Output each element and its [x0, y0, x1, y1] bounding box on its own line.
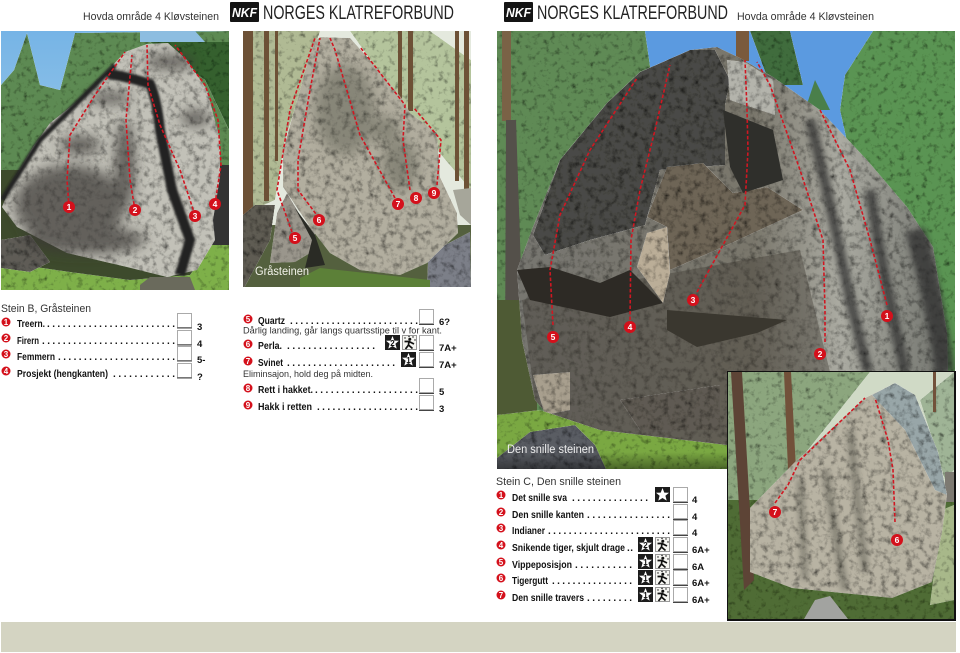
route 4: .. [627, 543, 633, 554]
route 4: Prosjekt (hengkanten) [17, 369, 108, 380]
badge 4 [209, 198, 221, 210]
route 5: 1 [643, 558, 648, 567]
badge 2 [129, 204, 141, 216]
header left: area title: Hovda område 4 Kløvsteinen [83, 11, 219, 23]
tree trunks [243, 31, 469, 231]
route 7: 6A+ [692, 595, 710, 606]
roof overhang shadows [647, 163, 803, 270]
header right: area title: Hovda område 4 Kløvsteinen [737, 11, 874, 23]
badge 5 [547, 331, 559, 343]
route 3: 4 [692, 528, 698, 539]
route 4: 4 [499, 541, 504, 550]
route 4: 6A+ [692, 545, 710, 556]
route 3: 3 [4, 350, 9, 359]
logo right: NKF [506, 5, 532, 20]
badge 3: 3 [691, 295, 696, 305]
badge 7: 7 [396, 199, 401, 209]
route 8: Rett i hakket. [258, 385, 313, 396]
badge 1 [881, 310, 893, 322]
route 2: .......................... [42, 336, 175, 347]
route 5: 6A [692, 562, 704, 573]
route 6: ................. [287, 341, 375, 352]
route 1: Treern. [17, 319, 45, 330]
route 2 [496, 504, 698, 523]
route 9: 3 [439, 404, 444, 415]
route 3: 3 [499, 524, 504, 533]
route 3: Indianer [512, 526, 545, 537]
route 1: 1 [4, 318, 9, 327]
photo: Gråsteinen with routes 5-9 [243, 31, 471, 290]
routes [550, 60, 887, 342]
badge 9 [428, 187, 440, 199]
boulder [2, 43, 220, 277]
route 9: 9 [246, 401, 251, 410]
badge 1 [63, 201, 75, 213]
route 1: ......................... [47, 319, 175, 330]
badge 3 [189, 210, 201, 222]
route 5 note: Dårlig landing, går langs quartsstipe til v for kant. [243, 326, 442, 336]
route 6: 6A+ [692, 578, 710, 589]
badge 1: 1 [67, 202, 72, 212]
route 1: 1 [499, 491, 504, 500]
foreground rock [497, 425, 606, 469]
route 7: 1 [406, 356, 411, 365]
route 7 note: Eliminsajon, hold deg på midten. [243, 369, 373, 380]
badge 3: 3 [193, 211, 198, 221]
route 8: 5 [439, 387, 445, 398]
badge 6: 6 [317, 215, 322, 225]
route 5: 5 [499, 558, 504, 567]
badge 3 [687, 294, 699, 306]
route 4: 4 [4, 367, 9, 376]
badge 4: 4 [213, 199, 218, 209]
grass [1, 240, 229, 290]
heading: Stein C, Den snille steinen [496, 476, 621, 488]
route 7: 7 [499, 591, 504, 600]
route 6: 1 [643, 574, 648, 583]
route 2: ................ [587, 510, 670, 521]
route 5: 6? [439, 317, 450, 328]
badge 2 [814, 348, 826, 360]
rock bottom right [427, 232, 471, 287]
route 9: Hakk i retten [258, 402, 312, 413]
route 2: Firern [17, 336, 39, 347]
route 4: ? [197, 372, 203, 383]
route 4: Snikende tiger, skjult drage [512, 543, 625, 554]
badge 6 [313, 214, 325, 226]
boulder [283, 37, 458, 275]
route 6: Perla. [258, 341, 282, 352]
route 9 [244, 396, 444, 415]
footer band [1, 622, 956, 652]
organisation name left: NORGES KLATREFORBUND [263, 3, 454, 24]
routes [67, 45, 221, 215]
route 5: Vippeposisjon [512, 560, 572, 571]
logo left: NKF [232, 5, 258, 20]
route 1 [496, 487, 698, 506]
route 1: Det snille sva [512, 493, 567, 504]
route 6 [496, 570, 710, 589]
route 4 [2, 364, 203, 383]
light rim near top [727, 60, 775, 115]
heading: Stein B, Gråsteinen [1, 303, 91, 315]
route 8: .................... [315, 385, 418, 396]
trunks [731, 372, 754, 590]
route 3: ....................... [58, 352, 175, 363]
route 6: 7A+ [439, 343, 457, 354]
badge 7 [392, 198, 404, 210]
routes [277, 38, 441, 232]
badge 7 [769, 506, 781, 518]
route 1: 3 [197, 322, 202, 333]
badge 8: 8 [414, 193, 419, 203]
route 7: 7 [246, 357, 251, 366]
route 2: Den snille kanten [512, 510, 584, 521]
photo: boulder B left face with routes 1-4 [1, 31, 229, 290]
badge 1: 1 [885, 311, 890, 321]
route 7: Den snille travers [512, 593, 584, 604]
badge 6: 6 [895, 535, 900, 545]
ground plants [497, 410, 727, 469]
badge 4 [624, 321, 636, 333]
route 6: 6 [246, 340, 251, 349]
boulder [517, 47, 948, 470]
route 6: Tigergutt [512, 576, 549, 587]
lower rock tone [522, 250, 830, 445]
route 5 [496, 554, 704, 573]
list: Gråsteinen routes 5-9 [243, 310, 457, 415]
photo: Den snille steinen with routes 1-5 [497, 31, 955, 470]
route 6: 2 [390, 339, 395, 348]
route 2: 2 [4, 334, 9, 343]
route 3: Femmern [17, 352, 55, 363]
route 8 [244, 378, 445, 398]
route 1: ............... [572, 493, 648, 504]
route 4: ............ [113, 369, 175, 380]
list: Stein B routes 1-4 [1, 303, 205, 383]
badge 5: 5 [551, 332, 556, 342]
leaning rock [270, 193, 315, 263]
route 1 [2, 314, 202, 333]
route 2: 2 [499, 508, 504, 517]
logo right [504, 2, 533, 22]
badge 5: 5 [293, 233, 298, 243]
badge 6 [891, 534, 903, 546]
photo caption: Gråsteinen [255, 266, 309, 278]
route 8: 8 [246, 384, 251, 393]
stripe shadows [810, 120, 945, 372]
route 7: 7A+ [439, 360, 457, 371]
logo left [230, 2, 259, 22]
list: Stein C routes 1-7 [496, 476, 710, 606]
route 6: ................ [552, 576, 632, 587]
route 2: 4 [692, 512, 698, 523]
badge 2: 2 [818, 349, 823, 359]
route 3 [2, 346, 205, 366]
route 7 [244, 352, 457, 371]
route 1: 4 [692, 495, 698, 506]
route 6 [244, 335, 457, 354]
route 2 [2, 330, 203, 350]
route 2: 4 [197, 339, 203, 350]
badge 7: 7 [773, 507, 778, 517]
route 9: .................... [317, 402, 418, 413]
upper dark rock [533, 50, 730, 255]
route 5: ......................... [290, 316, 418, 327]
route 3: ........................ [548, 526, 670, 537]
inset photo frame: routes 6-7 [727, 371, 956, 621]
photo caption: Den snille steinen [507, 444, 594, 456]
organisation name right: NORGES KLATREFORBUND [537, 3, 728, 24]
ground rock [804, 596, 848, 619]
boulder [750, 383, 947, 598]
route 7: 1 [643, 591, 648, 600]
routes [775, 398, 895, 522]
badge 9: 9 [432, 188, 437, 198]
route 4 [496, 537, 710, 556]
route 5 [244, 310, 450, 328]
badge 8 [410, 192, 422, 204]
badge 4: 4 [628, 322, 633, 332]
route 5: 5 [246, 315, 251, 324]
route 5: ........... [575, 560, 632, 571]
route 4: 2 [643, 541, 648, 550]
route 5: Quartz [258, 316, 285, 327]
badge 5 [289, 232, 301, 244]
route 7 [496, 587, 710, 606]
route 3 [496, 520, 698, 539]
route 7: Svinet [258, 358, 284, 369]
badge 2: 2 [133, 205, 138, 215]
route 3: 5- [197, 355, 205, 366]
route 6: 6 [499, 574, 504, 583]
route 7: ..................... [287, 358, 395, 369]
route 7: ......... [587, 593, 632, 604]
